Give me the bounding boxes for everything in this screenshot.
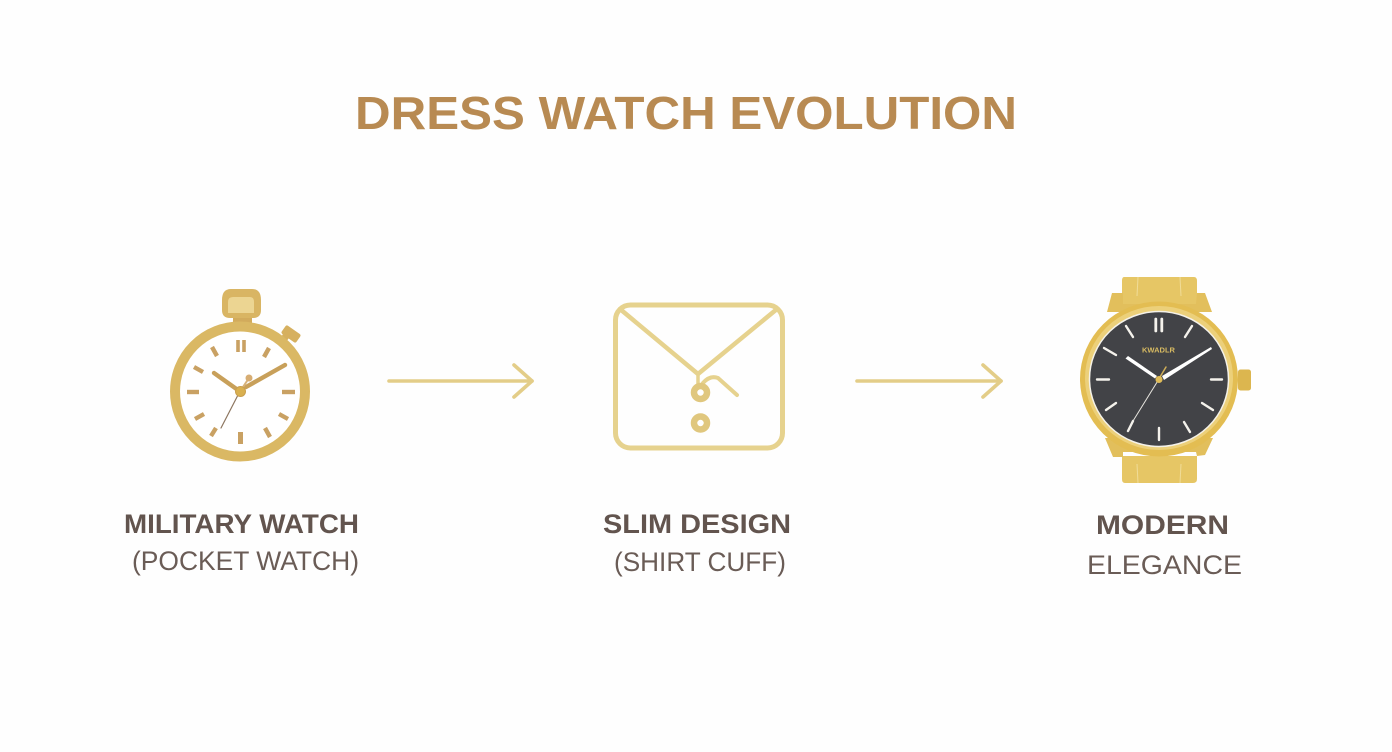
arrow: slim design to modern elegance (857, 365, 1001, 397)
label: military watch: MILITARY WATCH (124, 509, 359, 539)
strap highlights (1137, 277, 1181, 483)
brand text: KWADLR (1142, 346, 1176, 354)
watch crown (222, 289, 261, 326)
cuff outline (616, 305, 782, 448)
lugs (1105, 293, 1213, 457)
top strap (1122, 277, 1197, 304)
icon: shirt cuff (616, 305, 782, 448)
bezel (1080, 302, 1238, 456)
side pusher (279, 325, 301, 344)
icon: pocket watch (175, 289, 305, 456)
dial hands (1126, 347, 1212, 421)
label: slim design: SLIM DESIGN (603, 509, 791, 539)
label: pocket watch: (POCKET WATCH) (132, 546, 359, 576)
bottom strap (1122, 456, 1197, 483)
label: elegance: ELEGANCE (1087, 550, 1242, 580)
lower button (694, 416, 707, 430)
dial markers (1097, 319, 1222, 440)
watch case ring (175, 326, 305, 456)
label: modern: MODERN (1096, 510, 1229, 540)
label: shirt cuff: (SHIRT CUFF) (614, 547, 786, 577)
dial (1090, 312, 1228, 446)
title: DRESS WATCH EVOLUTION (355, 87, 1017, 139)
icon: modern wristwatch (1080, 277, 1251, 483)
cuff loop (703, 377, 737, 395)
hour markers (187, 340, 295, 444)
arrow: pocket watch to slim design (389, 365, 532, 397)
watch hands (214, 365, 285, 428)
winding crown (1238, 370, 1251, 390)
upper button (694, 386, 707, 399)
cuff fold (620, 309, 777, 374)
